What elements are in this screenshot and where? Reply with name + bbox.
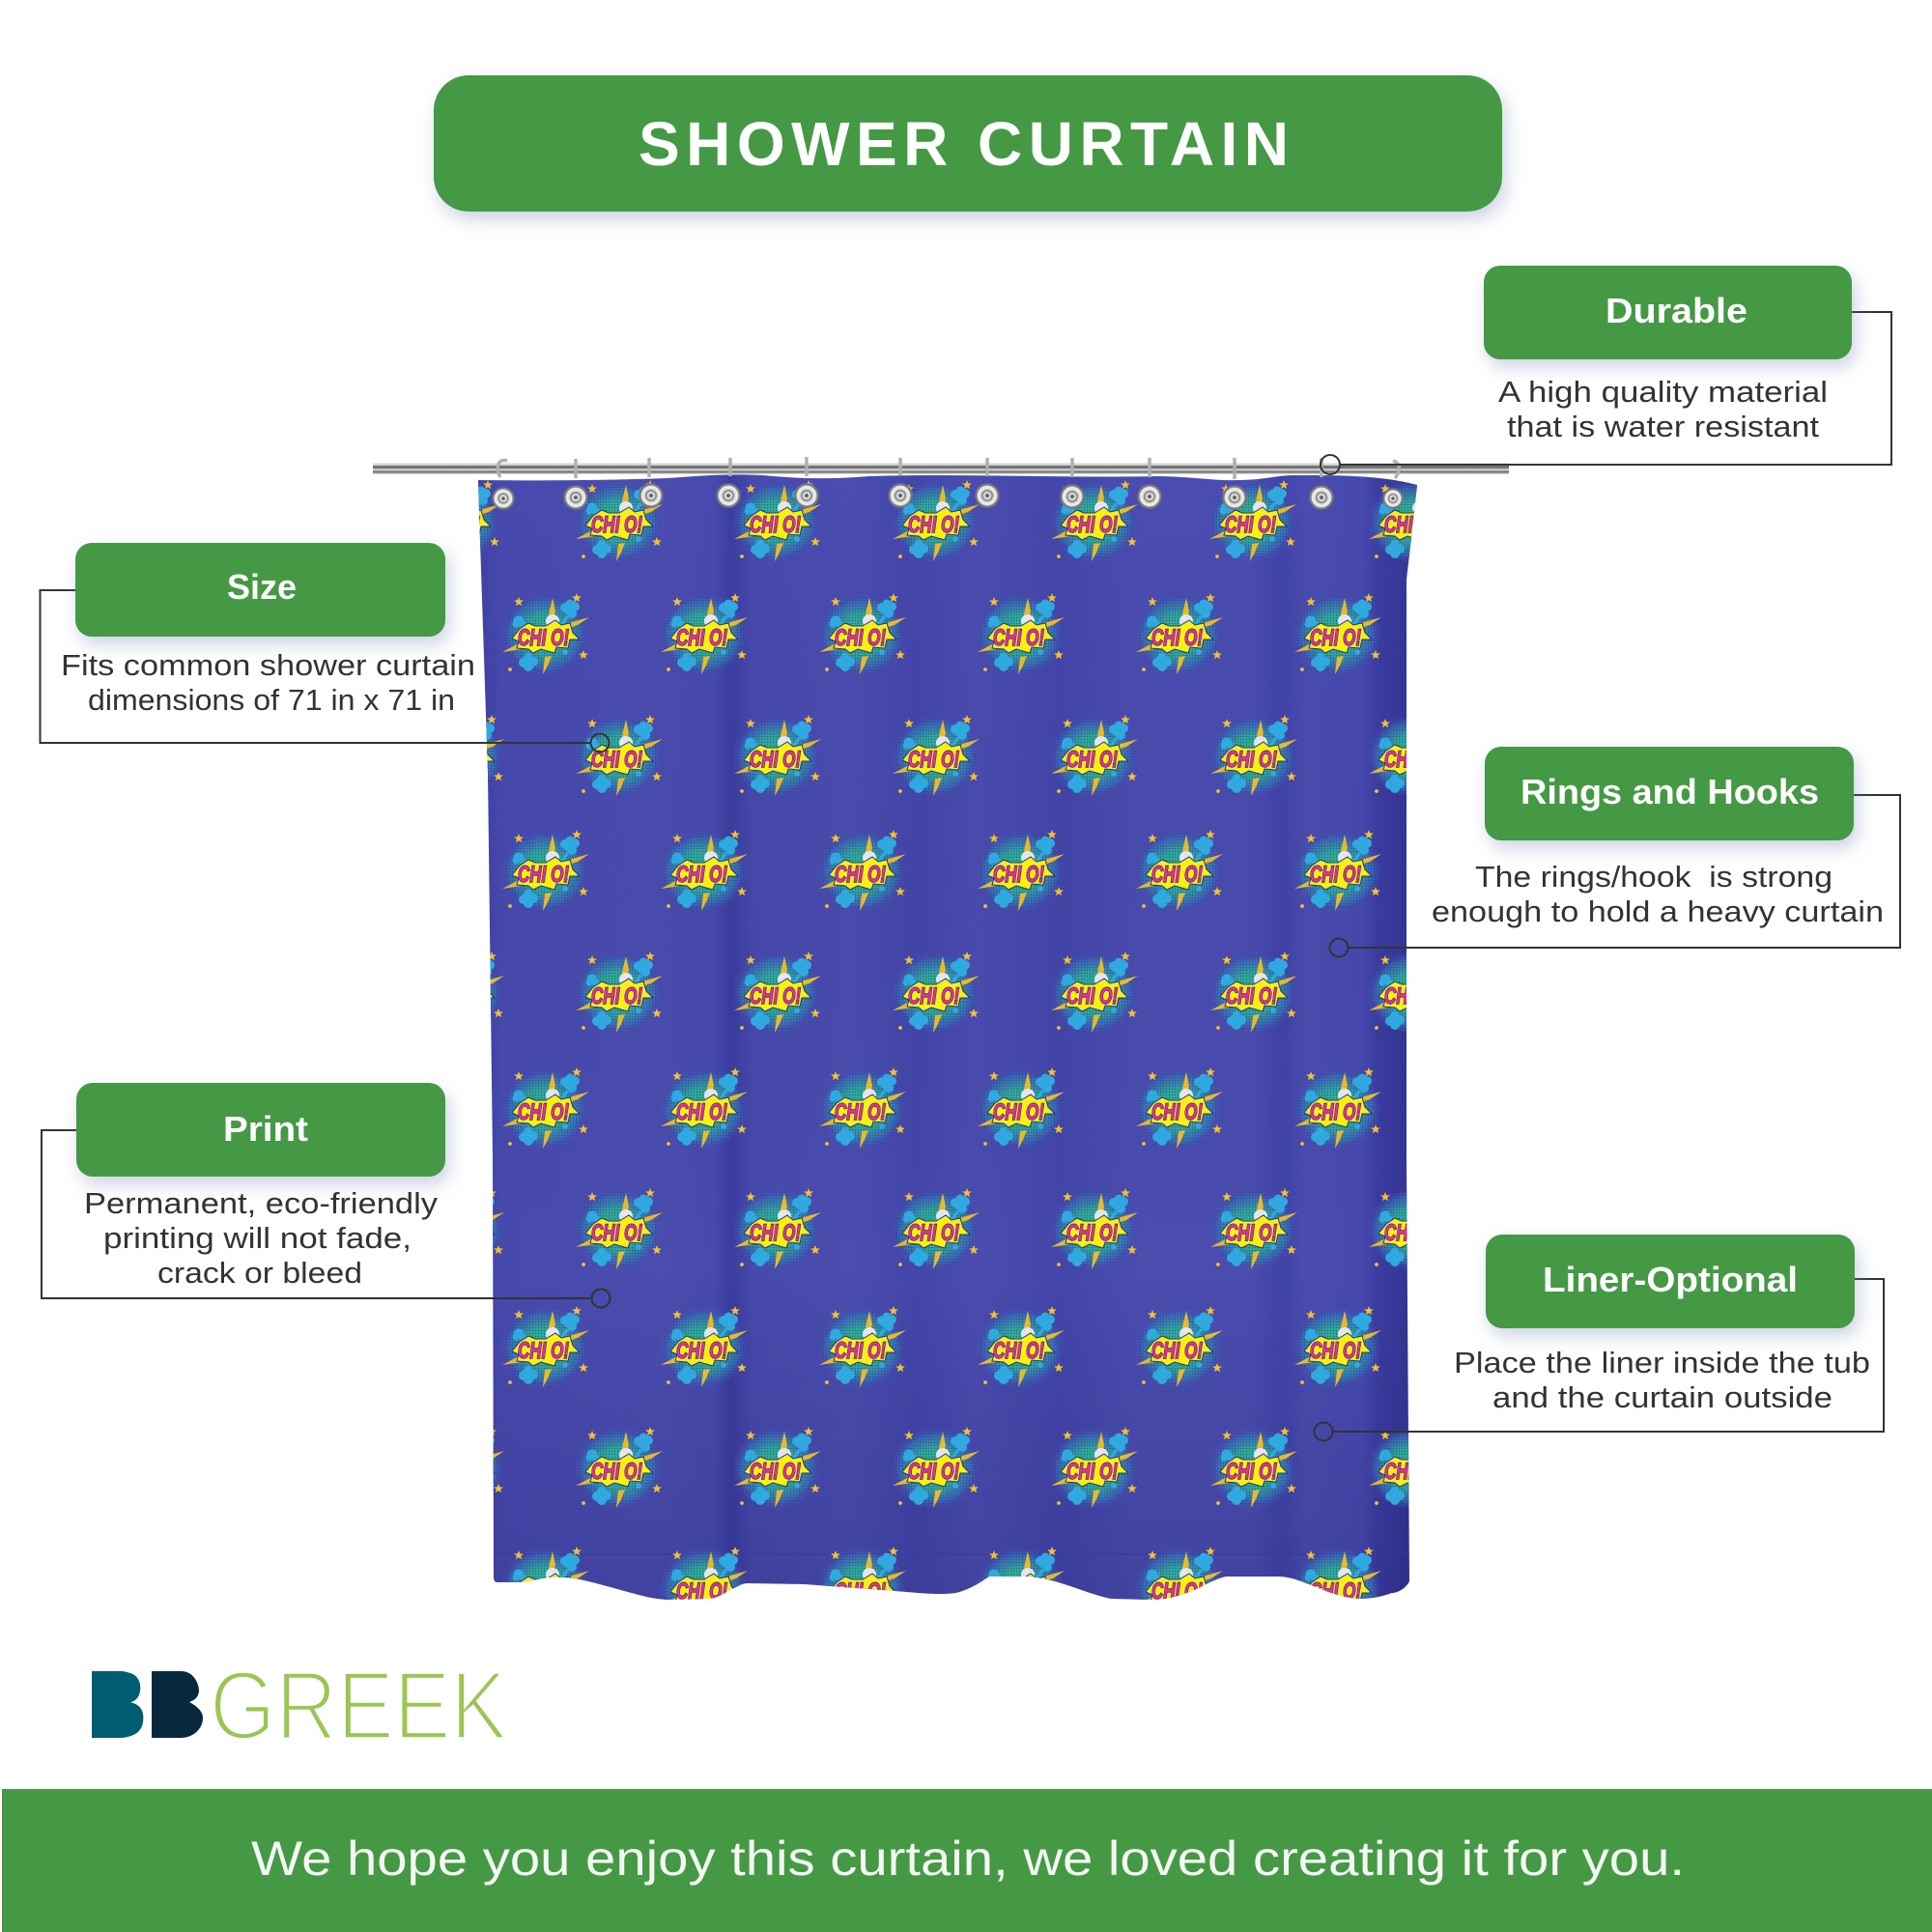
pattern row 1: CHI O!: [429, 512, 480, 538]
pattern row 4: [500, 830, 1381, 913]
pattern row 3: CHI O!: [908, 747, 959, 773]
pattern row 2: CHI O!: [835, 625, 886, 651]
callout: liner-optional: Place the liner inside the tub: [1454, 1346, 1870, 1379]
logo: BB Greek: [92, 1651, 507, 1760]
pattern row 10: CHI O!: [835, 1578, 886, 1605]
callout: durable: that is water resistant: [1507, 410, 1819, 443]
pattern row 7: CHI O!: [591, 1220, 642, 1246]
curtain hooks: [497, 457, 1399, 479]
callout: durable: [1484, 266, 1852, 443]
pattern row 1: CHI O!: [1066, 512, 1118, 538]
pattern row 5: CHI O!: [1226, 983, 1277, 1009]
callout: print: printing will not fade,: [103, 1221, 412, 1255]
pattern row 2: [500, 593, 1381, 676]
pattern row 10: CHI O!: [993, 1578, 1044, 1605]
pattern row 9: CHI O!: [750, 1459, 801, 1485]
pattern row 1: CHI O!: [908, 512, 959, 538]
pattern row 9: CHI O!: [1384, 1459, 1435, 1485]
pattern row 10: CHI O!: [1310, 1578, 1361, 1605]
pattern row 3: CHI O!: [1066, 747, 1118, 773]
pattern row 6: CHI O!: [676, 1099, 727, 1125]
curtain grommets: [493, 484, 1403, 509]
callout: print: Permanent, eco-friendly: [84, 1186, 439, 1220]
pattern row 2: CHI O!: [1151, 625, 1203, 651]
pattern row 6: CHI O!: [1151, 1099, 1203, 1125]
pattern row 9: CHI O!: [908, 1459, 959, 1485]
callout: rings and hooks: [1432, 747, 1884, 928]
callout: size: Fits common shower curtain: [61, 648, 475, 682]
pattern row 2: CHI O!: [518, 625, 569, 651]
callout: rings and hooks: The rings/hook is strong: [1475, 860, 1833, 894]
pattern row 7: CHI O!: [1066, 1220, 1118, 1246]
footer banner: [2, 1789, 1932, 1932]
pattern row 9: [493, 1427, 1408, 1508]
pattern row 2: CHI O!: [993, 625, 1044, 651]
pattern row 1: CHI O!: [1384, 512, 1435, 538]
callout: liner-optional: and the curtain outside: [1492, 1380, 1833, 1414]
pattern row 7: CHI O!: [908, 1220, 959, 1246]
pattern row 4: CHI O!: [518, 862, 569, 888]
pattern row 4: CHI O!: [835, 862, 886, 888]
callout: rings and hooks: Rings and Hooks: [1520, 772, 1819, 811]
pattern row 2: CHI O!: [676, 625, 727, 651]
pattern row 7: CHI O!: [433, 1220, 484, 1246]
pattern row 8: CHI O!: [1151, 1338, 1203, 1364]
pattern row 6: CHI O!: [1310, 1099, 1361, 1125]
pattern row 8: CHI O!: [518, 1338, 569, 1364]
pattern row 10: CHI O!: [1151, 1578, 1203, 1605]
logo: BB Greek: BB: [92, 1651, 202, 1757]
pattern row 8: CHI O!: [835, 1338, 886, 1364]
pattern row 4: CHI O!: [993, 862, 1044, 888]
callout: size: dimensions of 71 in x 71 in: [88, 683, 455, 717]
callout: print: [76, 1083, 445, 1290]
callout: durable: Durable: [1605, 291, 1747, 330]
callout: liner-optional: [1454, 1235, 1870, 1414]
pattern row 1: CHI O!: [591, 512, 642, 538]
pattern row 3: CHI O!: [1226, 747, 1277, 773]
pattern row 5: CHI O!: [908, 983, 959, 1009]
pattern row 3: CHI O!: [750, 747, 801, 773]
pattern row 8: CHI O!: [993, 1338, 1044, 1364]
pattern row 9: CHI O!: [1066, 1459, 1118, 1485]
pattern row 5: CHI O!: [591, 983, 642, 1009]
pattern row 4: CHI O!: [1310, 862, 1361, 888]
pattern row 4: CHI O!: [676, 862, 727, 888]
curtain: [478, 457, 1417, 1600]
pattern row 1: [478, 480, 1417, 561]
pattern row 3: [486, 715, 1406, 796]
callout: liner-optional: Liner-Optional: [1543, 1260, 1798, 1299]
pattern row 6: CHI O!: [835, 1099, 886, 1125]
shower rod: [373, 463, 1509, 474]
pattern row 5: CHI O!: [1066, 983, 1118, 1009]
pattern row 8: [500, 1306, 1381, 1389]
pattern row 8: CHI O!: [1310, 1338, 1361, 1364]
pattern row 6: CHI O!: [993, 1099, 1044, 1125]
callout: durable: A high quality material: [1498, 375, 1828, 409]
callout: size: Size: [227, 567, 297, 607]
pattern row 9: CHI O!: [433, 1459, 484, 1485]
pattern row 6: [500, 1067, 1381, 1151]
pattern row 7: CHI O!: [750, 1220, 801, 1246]
pattern row 9: CHI O!: [1226, 1459, 1277, 1485]
pattern row 3: CHI O!: [591, 747, 642, 773]
pattern row 7: CHI O!: [1226, 1220, 1277, 1246]
pattern row 10: CHI O!: [518, 1578, 569, 1605]
pattern row 5: CHI O!: [750, 983, 801, 1009]
pattern row 1: CHI O!: [1225, 512, 1276, 538]
pattern row 5: CHI O!: [1384, 983, 1435, 1009]
pattern row 4: CHI O!: [1151, 862, 1203, 888]
title banner: SHOWER CURTAIN: [639, 109, 1289, 179]
pattern row 10: CHI O!: [676, 1578, 727, 1605]
title banner: [434, 75, 1502, 212]
pattern row 9: CHI O!: [591, 1459, 642, 1485]
pattern row 3: CHI O!: [433, 747, 484, 773]
pattern row 8: CHI O!: [676, 1338, 727, 1364]
logo: BB Greek: GREEK: [210, 1652, 507, 1760]
pattern row 6: CHI O!: [518, 1099, 569, 1125]
curtain fabric: [478, 474, 1417, 1600]
pattern row 2: CHI O!: [1310, 625, 1361, 651]
callout: size: [61, 543, 475, 717]
pattern row 7: CHI O!: [1384, 1220, 1435, 1246]
pattern row 5: CHI O!: [433, 983, 484, 1009]
pattern row 7: [493, 1188, 1407, 1269]
callout: print: Print: [223, 1109, 308, 1149]
pattern row 10: [504, 1547, 1381, 1600]
pattern row 1: CHI O!: [750, 512, 801, 538]
callout: rings and hooks: enough to hold a heavy curtain: [1432, 895, 1884, 928]
leader lines: [41, 312, 1900, 1441]
callout: print: crack or bleed: [157, 1256, 362, 1290]
pattern row 3: CHI O!: [1384, 747, 1435, 773]
pattern row 5: [490, 952, 1406, 1033]
footer banner: We hope you enjoy this curtain, we loved creating it for you.: [251, 1832, 1685, 1886]
